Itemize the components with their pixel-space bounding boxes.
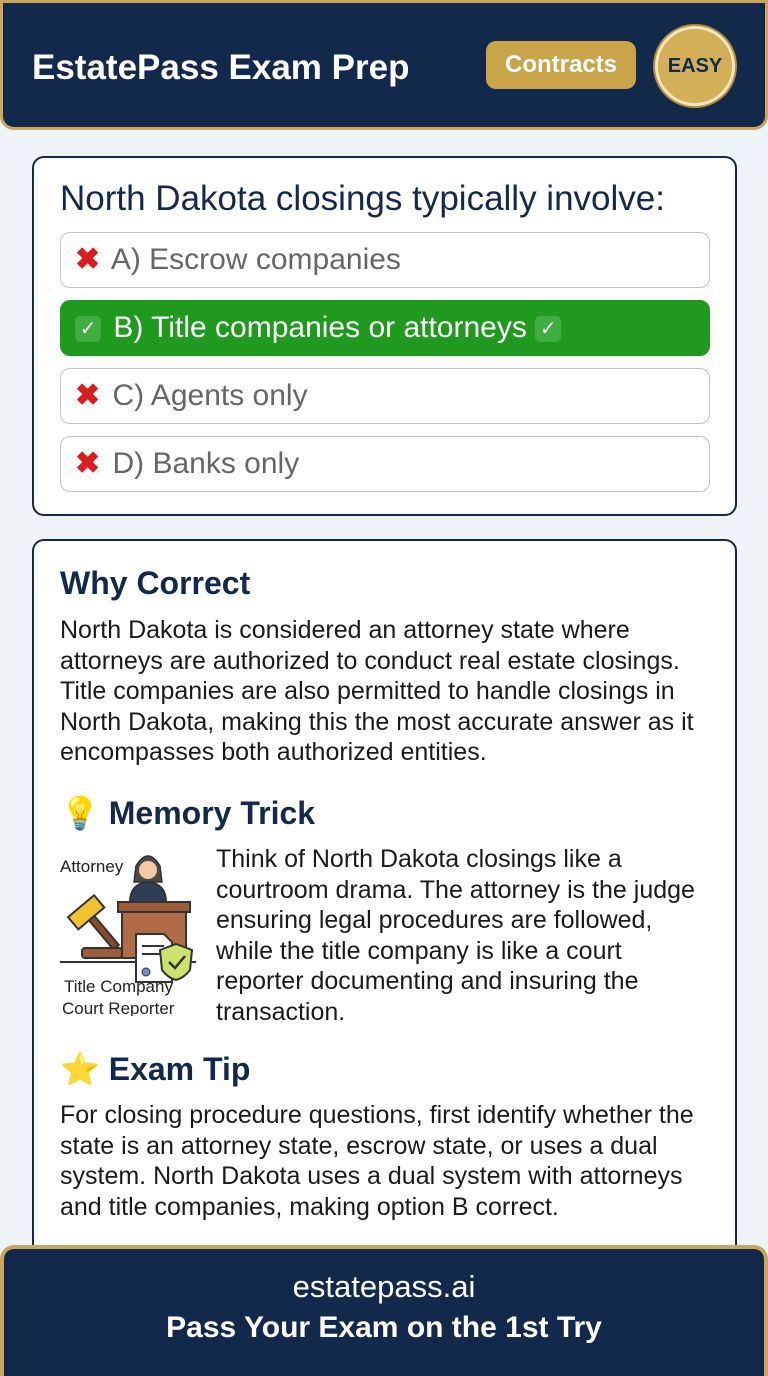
why correct text	[60, 616, 694, 766]
memory illustration	[60, 855, 196, 1016]
exam tip text	[60, 1101, 694, 1220]
question card	[32, 156, 737, 516]
exam tip text: and title companies, making option B correct.	[60, 1192, 559, 1220]
memory illustration: Attorney	[60, 857, 124, 876]
option A: ✖ A) Escrow companies	[75, 243, 401, 276]
memory illustration: Title Company	[64, 977, 173, 996]
memory trick text: transaction.	[216, 998, 345, 1026]
exam tip heading: ⭐ Exam Tip	[60, 1051, 250, 1087]
memory trick text: Think of North Dakota closings like a	[216, 845, 622, 873]
memory trick text	[216, 845, 695, 1026]
exam tip text: system. North Dakota uses a dual system with attorneys	[60, 1162, 682, 1190]
memory trick heading: 💡 Memory Trick	[60, 795, 315, 831]
exam tip text: state is an attorney state, escrow state, or uses a dual	[60, 1132, 658, 1160]
why correct text: Title companies are also permitted to handle closings in	[60, 677, 675, 705]
option C: ✖ C) Agents only	[75, 379, 308, 412]
explanation card	[32, 539, 737, 1299]
option D: ✖ D) Banks only	[75, 447, 299, 480]
header bar	[0, 0, 768, 130]
footer bar	[0, 1245, 768, 1376]
option C	[60, 368, 710, 424]
option A	[60, 232, 710, 288]
option B correct	[60, 300, 710, 356]
option B correct: ✓	[80, 318, 96, 340]
question text: North Dakota closings typically involve:	[60, 179, 665, 218]
why correct text: attorneys are authorized to conduct real estate closings.	[60, 646, 680, 674]
why correct text: encompasses both authorized entities.	[60, 738, 487, 766]
category pill: Contracts	[505, 51, 617, 78]
category pill	[486, 41, 636, 89]
why correct heading: Why Correct	[60, 565, 250, 601]
option B correct: B) Title companies or attorneys	[113, 311, 527, 344]
memory trick text: ensuring legal procedures are followed,	[216, 906, 652, 934]
memory trick text: while the title company is like a court	[216, 936, 622, 964]
difficulty badge	[655, 26, 735, 106]
difficulty badge: EASY	[668, 55, 722, 77]
why correct text: North Dakota, making this the most accurate answer as it	[60, 708, 694, 736]
option B correct: ✓	[540, 318, 557, 340]
memory trick text: courtroom drama. The attorney is the judge	[216, 876, 695, 904]
website: estatepass.ai	[293, 1269, 475, 1304]
why correct text: North Dakota is considered an attorney state where	[60, 616, 630, 644]
exam tip text: For closing procedure questions, first identify whether the	[60, 1101, 694, 1129]
memory trick text: reporter documenting and insuring the	[216, 967, 638, 995]
option D	[60, 436, 710, 492]
tagline: Pass Your Exam on the 1st Try	[166, 1311, 602, 1344]
title: EstatePass Exam Prep	[32, 48, 409, 87]
